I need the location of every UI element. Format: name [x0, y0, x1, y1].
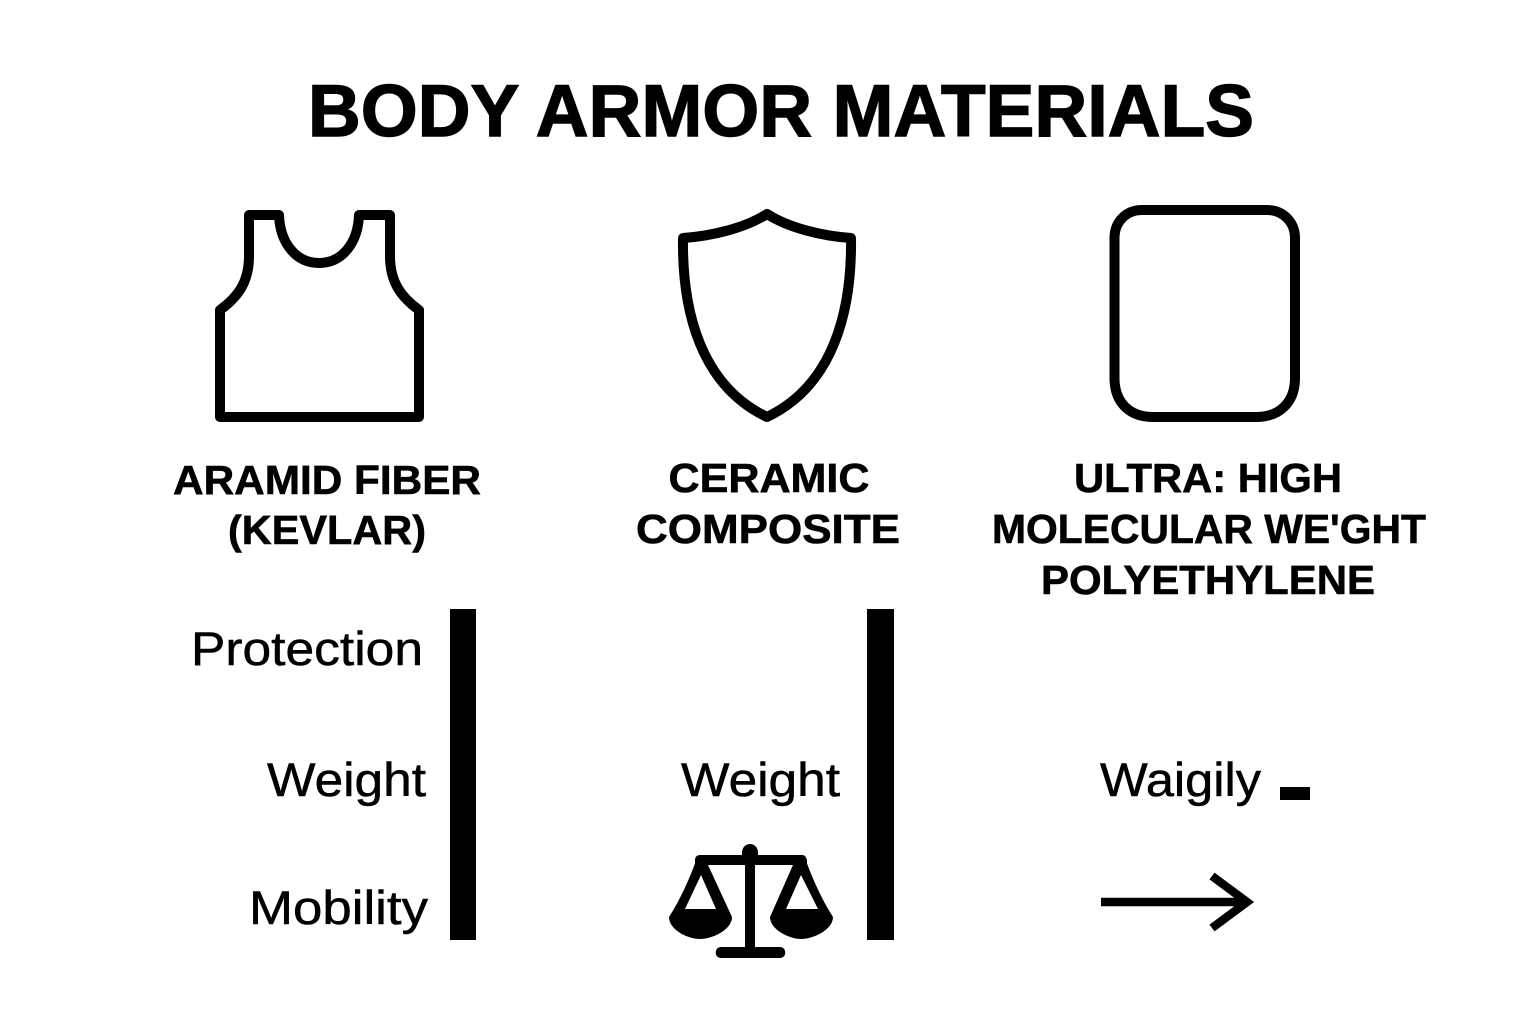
arrow: [1101, 876, 1247, 928]
heading: ultra high molecular weight polyethylene: ULTRA: HIGH: [1074, 455, 1342, 501]
title: BODY ARMOR MATERIALS: [308, 71, 1254, 152]
label: weight column 1: Weight: [267, 753, 426, 806]
bar: column 2: [867, 609, 894, 940]
bar: column 3 short: [1280, 787, 1310, 800]
icon: plate: [1114, 210, 1295, 417]
label: weight column 2: Weight: [681, 753, 840, 806]
heading: ultra high molecular weight polyethylene: [992, 455, 1426, 603]
bar: column 1: [450, 609, 476, 940]
heading: aramid fiber: [173, 457, 481, 553]
heading: ceramic composite: [636, 455, 900, 552]
icon: balance scale: [669, 844, 833, 958]
icon: vest: [220, 215, 419, 417]
heading: ceramic composite: CERAMIC: [668, 455, 870, 501]
heading: aramid fiber: (KEVLAR): [228, 507, 426, 553]
heading: ceramic composite: COMPOSITE: [636, 506, 900, 552]
label: protection: Protection: [191, 622, 423, 675]
icon: shield: [683, 214, 851, 417]
label: weight column 3: Waigily: [1100, 753, 1262, 806]
heading: aramid fiber: ARAMID FIBER: [173, 457, 481, 503]
label: mobility: Mobility: [249, 881, 429, 934]
heading: ultra high molecular weight polyethylene: MOLECULAR WE'GHT: [992, 506, 1426, 552]
heading: ultra high molecular weight polyethylene: POLYETHYLENE: [1041, 557, 1375, 603]
